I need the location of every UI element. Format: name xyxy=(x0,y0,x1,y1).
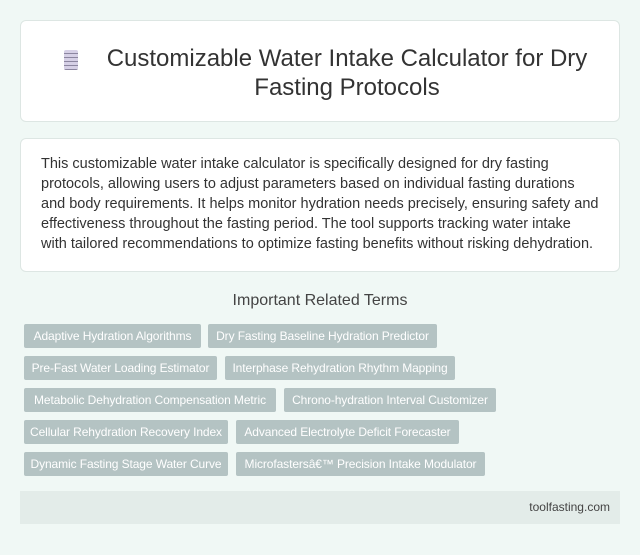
related terms heading: Important Related Terms xyxy=(233,292,407,309)
title: Customizable Water Intake Calculator for Dry xyxy=(107,45,587,72)
description text: This customizable water intake calculator is specifically designed for dry fasting xyxy=(41,156,549,172)
footer xyxy=(20,491,620,524)
icon: document xyxy=(64,50,78,70)
title xyxy=(107,45,588,101)
tags: Interphase Rehydration Rhythm Mapping xyxy=(232,361,448,375)
tags: Dynamic Fasting Stage Water Curve xyxy=(30,457,222,471)
description text: and body requirements. It helps monitor hydration needs precisely, ensuring safety and xyxy=(41,196,598,212)
tags: Metabolic Dehydration Compensation Metric xyxy=(34,393,266,407)
tags: Advanced Electrolyte Deficit Forecaster xyxy=(244,425,451,439)
description text: with tailored recommendations to optimize fasting benefits without risking dehydration. xyxy=(41,236,593,252)
tags: Microfastersâ€™ Precision Intake Modulator xyxy=(245,457,476,471)
description panel xyxy=(20,138,620,272)
description text: protocols, allowing users to adjust parameters based on individual fasting durations xyxy=(41,176,575,192)
tags: Chrono-hydration Interval Customizer xyxy=(292,393,488,407)
footer text: toolfasting.com xyxy=(529,500,610,514)
tags: Pre-Fast Water Loading Estimator xyxy=(32,361,209,375)
tags: Cellular Rehydration Recovery Index xyxy=(30,425,222,439)
tags: Adaptive Hydration Algorithms xyxy=(34,329,191,343)
title: Fasting Protocols xyxy=(254,74,440,101)
description text: effectiveness throughout the fasting period. The tool supports tracking water intake xyxy=(41,216,571,232)
header panel xyxy=(20,20,620,122)
tags: Dry Fasting Baseline Hydration Predictor xyxy=(216,329,429,343)
description text xyxy=(41,156,598,252)
